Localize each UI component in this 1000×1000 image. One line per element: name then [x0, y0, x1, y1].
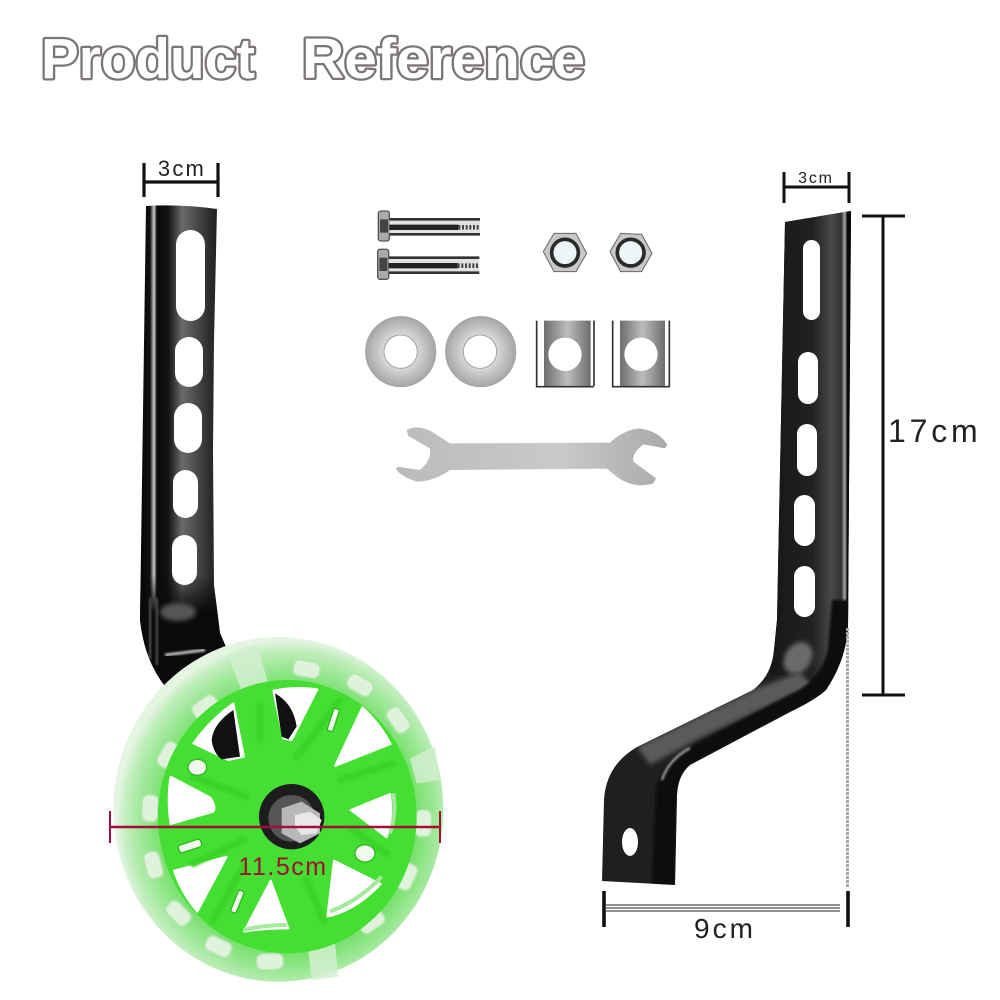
title: [41, 27, 585, 91]
washers: [366, 317, 516, 387]
bolts: [378, 211, 480, 279]
wheel diameter dimension: 11.5cm: [238, 853, 328, 881]
left bracket slots: [172, 230, 205, 585]
left bracket: [140, 205, 226, 685]
right 3cm dimension: [784, 170, 849, 203]
17cm dimension: 17cm: [888, 413, 981, 449]
wheel diameter dimension: [110, 811, 440, 881]
title: Reference: [302, 27, 585, 91]
wrench: [396, 427, 667, 485]
title: Product: [41, 27, 255, 91]
hub: [259, 784, 324, 849]
nuts: [543, 233, 652, 272]
right bracket: [602, 205, 856, 885]
right bracket shading: [637, 205, 856, 885]
left bracket lower dent: [140, 576, 226, 685]
right 3cm dimension: 3cm: [798, 170, 834, 187]
left 3cm dimension: [144, 156, 218, 197]
bracket seen through wheel: [212, 693, 297, 759]
spoke recesses: [193, 700, 393, 920]
right bracket slots: [622, 240, 820, 856]
hardware parts: [366, 211, 670, 485]
plates: [537, 321, 670, 387]
green spoke disc: [158, 680, 417, 953]
9cm dimension: 9cm: [694, 913, 756, 944]
spoke holes: [178, 708, 375, 914]
spoke windows: [169, 688, 391, 932]
9cm dimension: [604, 628, 848, 944]
rim clear bands: [228, 643, 440, 980]
wheel: [113, 637, 443, 982]
wheel rim: [113, 637, 443, 982]
rim slots: [142, 659, 432, 970]
green rim seen through windows: [243, 793, 394, 930]
17cm dimension: [862, 216, 981, 695]
left 3cm dimension: 3cm: [158, 156, 206, 181]
